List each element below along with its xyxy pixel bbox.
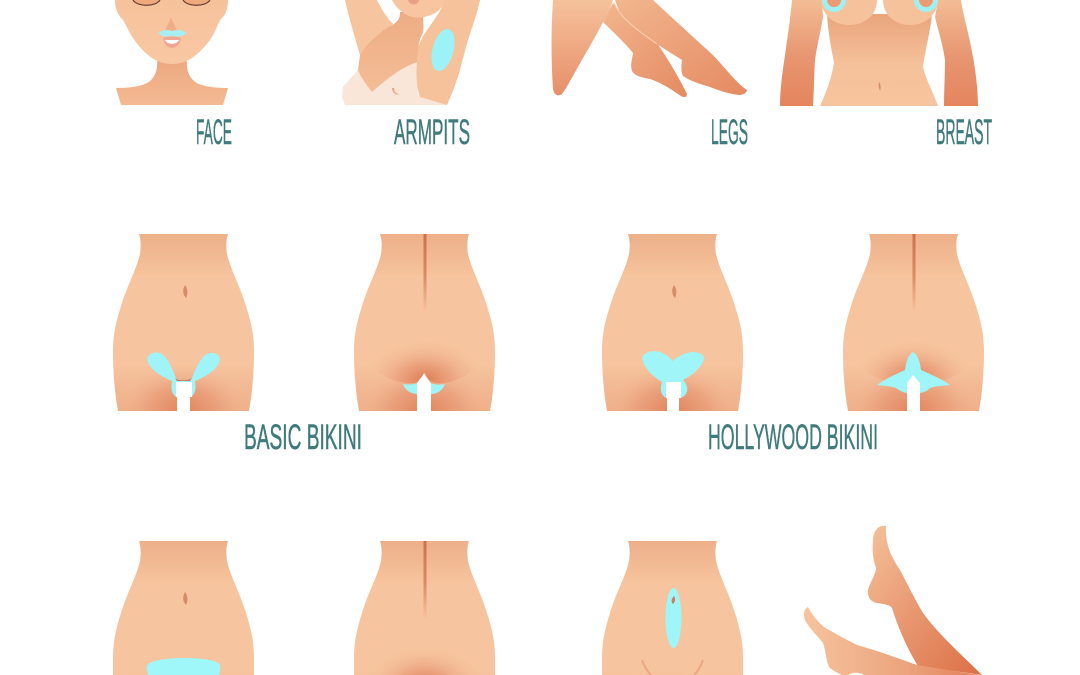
icon: wax rings — [824, 0, 844, 10]
panel: navel line — [602, 541, 743, 675]
panel: armpits: ARMPITS — [394, 113, 470, 152]
back view — [354, 541, 495, 675]
panel: face — [115, 0, 232, 152]
wax area: basic back — [403, 382, 445, 394]
label: hollywood bikini: HOLLYWOOD BIKINI — [708, 418, 878, 457]
panel: breast — [780, 0, 992, 152]
back view — [843, 234, 984, 411]
infographic canvas: BREAST — [936, 113, 992, 152]
panel: hollywood bikini — [602, 234, 984, 457]
icon: upper leg — [868, 526, 982, 675]
wax area: basic front — [147, 352, 220, 397]
back view — [354, 234, 495, 411]
face illustration — [115, 0, 228, 105]
icon: lower leg — [804, 607, 979, 675]
panel: basic bikini — [113, 234, 495, 457]
panel: legs, bottom right — [804, 526, 982, 675]
panel: legs — [552, 0, 748, 152]
torso illustration — [780, 0, 978, 106]
front view — [113, 234, 254, 411]
icon: navel — [672, 596, 675, 604]
panel: bikini line, cropped bottom row — [113, 541, 495, 675]
wax area: bikini line — [147, 658, 220, 675]
front view — [113, 541, 254, 675]
wax area: hollywood front — [642, 351, 704, 398]
infographic canvas: LEGS — [711, 113, 748, 152]
panel: armpits — [342, 0, 480, 152]
wax area: hollywood back — [877, 352, 950, 393]
wax area: navel line — [666, 588, 682, 648]
icon: wax strip on upper lip — [158, 30, 187, 37]
armpits illustration — [342, 0, 480, 105]
label: basic bikini: BASIC BIKINI — [244, 418, 362, 457]
legs illustration — [552, 0, 747, 97]
front view — [602, 234, 743, 411]
infographic canvas: FACE — [196, 113, 232, 152]
icon: wax patch on armpit — [427, 27, 459, 73]
